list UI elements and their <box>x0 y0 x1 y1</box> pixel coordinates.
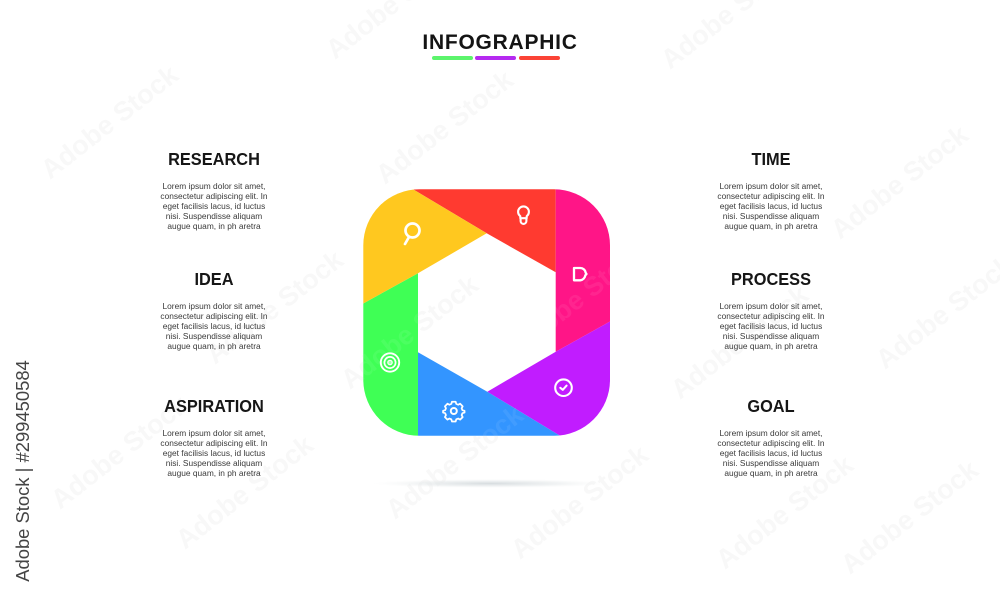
watermark: Adobe Stock <box>835 454 985 580</box>
watermark: Adobe Stock <box>710 449 860 575</box>
text block: goal <box>717 396 825 478</box>
watermark over diagram: Adobe Stock <box>505 234 655 360</box>
text block: process: eget facilisis lacus, id luctus <box>720 321 822 331</box>
watermark over diagram <box>335 234 655 525</box>
text block: process: PROCESS <box>731 269 811 289</box>
icon: magnifier <box>405 224 420 244</box>
watermark: Adobe Stock <box>370 64 520 190</box>
text block: time: consectetur adipiscing elit. In <box>717 191 825 201</box>
text block: process: Lorem ipsum dolor sit amet, <box>720 301 822 311</box>
text block: aspiration: augue quam, in ph aretra <box>167 468 261 478</box>
text block: aspiration <box>160 396 268 478</box>
title: INFOGRAPHIC <box>422 31 578 54</box>
icon: light bulb <box>518 206 529 224</box>
text block: idea: IDEA <box>194 269 234 289</box>
icon: clock check <box>555 379 572 396</box>
title bar: purple <box>475 56 516 60</box>
watermark: Adobe Stock <box>335 269 485 395</box>
segment: pink <box>556 189 610 352</box>
text block: aspiration: eget facilisis lacus, id luctus <box>163 448 265 458</box>
text block: time: eget facilisis lacus, id luctus <box>720 201 822 211</box>
watermark: Adobe Stock <box>45 389 195 515</box>
text block: goal: consectetur adipiscing elit. In <box>717 438 825 448</box>
text block: goal: nisi. Suspendisse aliquam <box>723 458 819 468</box>
shadow under diagram <box>372 479 608 488</box>
text block: idea: nisi. Suspendisse aliquam <box>166 331 262 341</box>
stock id label: Adobe Stock | #299450584 <box>12 360 33 582</box>
watermark: Adobe Stock <box>35 59 185 185</box>
text block: idea: Lorem ipsum dolor sit amet, <box>163 301 265 311</box>
icon: document shape <box>574 268 587 280</box>
watermark: Adobe Stock <box>380 399 530 525</box>
segment: yellow <box>363 190 487 304</box>
watermark: Adobe Stock <box>825 119 975 245</box>
text block: research <box>160 149 268 231</box>
text block: time: nisi. Suspendisse aliquam <box>723 211 819 221</box>
text block: goal: Lorem ipsum dolor sit amet, <box>720 428 822 438</box>
text block: aspiration: consectetur adipiscing elit. In <box>160 438 268 448</box>
text block: time: TIME <box>751 149 791 169</box>
text block: research: consectetur adipiscing elit. In <box>160 191 268 201</box>
watermark: Adobe Stock <box>200 244 350 370</box>
text block: time: augue quam, in ph aretra <box>724 221 818 231</box>
text block: research: nisi. Suspendisse aliquam <box>166 211 262 221</box>
text block: process: nisi. Suspendisse aliquam <box>723 331 819 341</box>
segment: red <box>413 180 556 272</box>
segment: purple <box>488 322 610 436</box>
text block: aspiration: nisi. Suspendisse aliquam <box>166 458 262 468</box>
text block: research: augue quam, in ph aretra <box>167 221 261 231</box>
text block: aspiration: Lorem ipsum dolor sit amet, <box>163 428 265 438</box>
text block: idea: eget facilisis lacus, id luctus <box>163 321 265 331</box>
text block: goal: eget facilisis lacus, id luctus <box>720 448 822 458</box>
text block: process: consectetur adipiscing elit. In <box>717 311 825 321</box>
text block: research: RESEARCH <box>168 149 260 169</box>
text block: process: augue quam, in ph aretra <box>724 341 818 351</box>
text block: aspiration: ASPIRATION <box>164 396 264 416</box>
text block: idea: augue quam, in ph aretra <box>167 341 261 351</box>
watermark: Adobe Stock <box>505 439 655 565</box>
text block: research: Lorem ipsum dolor sit amet, <box>163 181 265 191</box>
text block: idea: consectetur adipiscing elit. In <box>160 311 268 321</box>
text block: idea <box>160 269 268 351</box>
title bar: green <box>432 56 473 60</box>
watermark over diagram: Adobe Stock <box>335 269 485 395</box>
watermark: Adobe Stock <box>170 429 320 555</box>
segment: green <box>363 273 418 436</box>
text block: process <box>717 269 825 351</box>
segment: blue <box>418 352 560 445</box>
text block: goal: augue quam, in ph aretra <box>724 468 818 478</box>
text block: time: Lorem ipsum dolor sit amet, <box>720 181 822 191</box>
title bar: red <box>519 56 560 60</box>
icon: gear <box>443 402 465 421</box>
text block: time <box>717 149 825 231</box>
watermark over diagram: Adobe Stock <box>380 399 530 525</box>
diagram: six-segment rounded square <box>363 189 610 436</box>
icon: target <box>381 353 399 372</box>
text block: research: eget facilisis lacus, id luctus <box>163 201 265 211</box>
text block: goal: GOAL <box>747 396 795 416</box>
watermark: Adobe Stock <box>665 279 815 405</box>
